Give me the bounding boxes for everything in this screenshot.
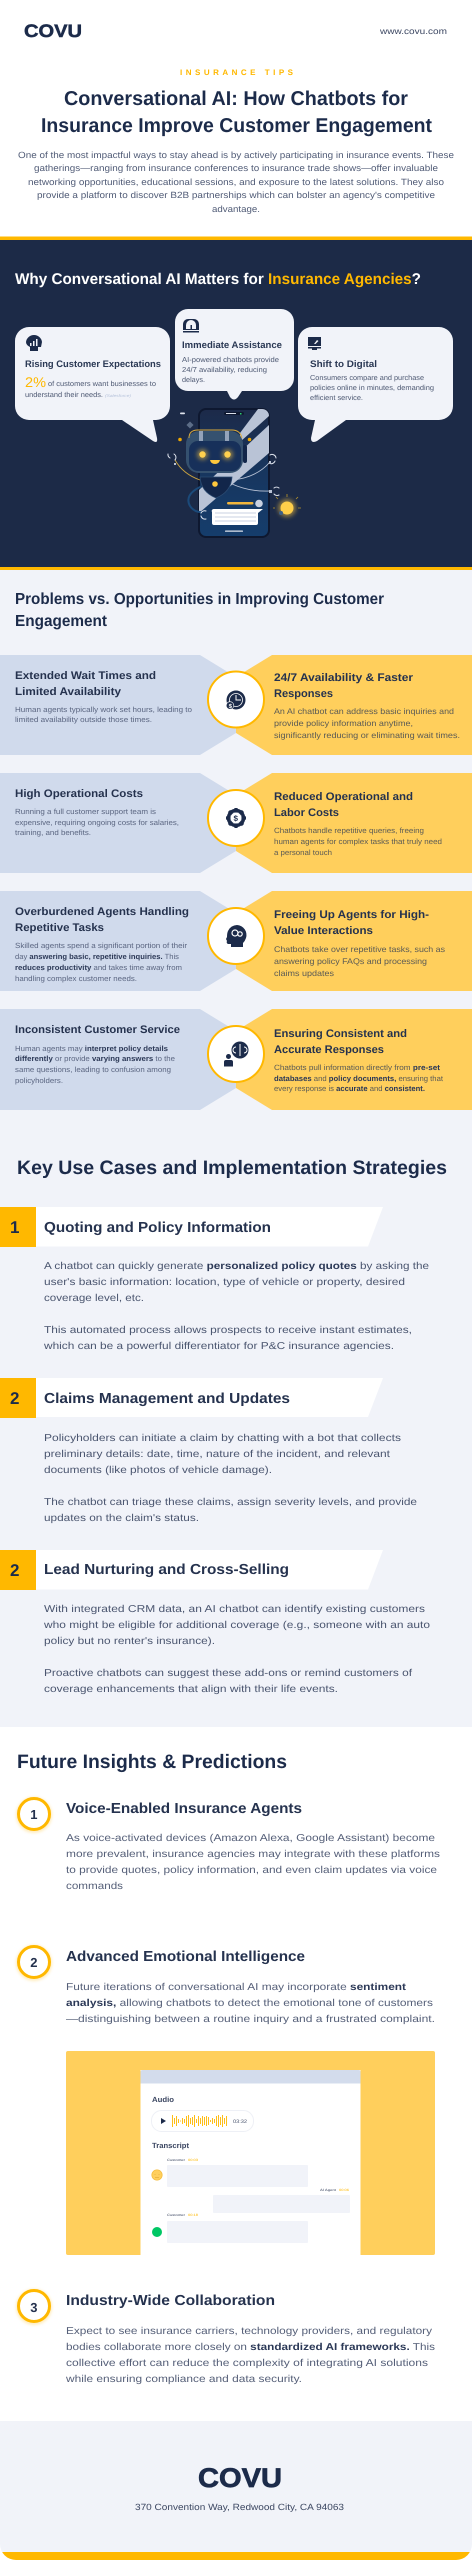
lightbulb xyxy=(273,494,301,517)
opportunity card: a personal touch xyxy=(274,848,332,857)
row: wait times vs availability xyxy=(0,655,472,755)
problem card xyxy=(0,655,236,755)
insight 1: voice-enabled agents: Voice-Enabled Insurance Agents xyxy=(66,1801,302,1817)
robot arms xyxy=(168,454,279,519)
body text: With integrated CRM data, an AI chatbot can identify existing customers xyxy=(44,1604,425,1615)
message: customer, positive: 00:18 xyxy=(188,2213,198,2217)
use case 3: lead nurturing and cross-selling: Lead Nurturing and Cross-Selling xyxy=(44,1562,289,1578)
message: customer, positive: Customer xyxy=(167,2213,186,2217)
transcript label: Transcript xyxy=(152,2141,190,2150)
audio player xyxy=(152,2110,254,2132)
heading: Engagement xyxy=(15,613,108,630)
insight 2: emotional intelligence: analysis, allowing chatbots to detect the emotional tone of customers xyxy=(66,1998,433,2009)
heading: Future Insights & Predictions xyxy=(17,1751,287,1773)
message: customer, neutral: Customer xyxy=(167,2158,186,2162)
row: consistency xyxy=(0,1009,472,1110)
body text: coverage level, etc. xyxy=(44,1293,144,1304)
body text: updates on the claim's status. xyxy=(44,1513,199,1524)
floating shapes xyxy=(180,412,194,429)
problem card: policyholders. xyxy=(15,1076,63,1085)
insight 3: industry-wide collaboration xyxy=(18,2290,435,2385)
use case 3: lead nurturing and cross-selling xyxy=(0,1550,431,1695)
audio label: Audio xyxy=(152,2095,174,2104)
panel: why conversational AI matters xyxy=(0,236,472,570)
address: 370 Convention Way, Redwood City, CA 94063 xyxy=(135,2502,344,2512)
insight 3: industry-wide collaboration: 3 xyxy=(30,2300,38,2315)
icon: head with gears xyxy=(208,908,264,964)
problem card xyxy=(0,773,236,873)
problem card: High Operational Costs xyxy=(15,788,143,800)
speech bubble: shift to digital xyxy=(298,327,453,442)
speech bubble: shift to digital: policies online in minutes, demanding xyxy=(310,383,434,392)
message: customer, neutral: 00:03 xyxy=(188,2158,198,2162)
use case 1: quoting and policy information: 1 xyxy=(10,1218,19,1237)
icon: monitor xyxy=(308,337,321,350)
body text: preliminary details: date, time, nature of the incident, and relevant xyxy=(44,1449,390,1460)
opportunity card: Accurate Responses xyxy=(274,1044,384,1056)
body text xyxy=(43,1604,431,1695)
message: AI agent: AI Agent xyxy=(320,2188,336,2192)
row: operational costs xyxy=(0,773,472,873)
heading: Problems vs. Opportunities in Improving Customer xyxy=(15,591,384,608)
icon: speedometer xyxy=(183,319,199,332)
insight 1: voice-enabled agents: As voice-activated devices (Amazon Alexa, Google Assistant) become xyxy=(66,1833,436,1844)
insight 3: industry-wide collaboration: while ensuring compliance and data security. xyxy=(65,2374,302,2385)
problem card: Human agents may interpret policy details xyxy=(15,1044,168,1053)
insight 3: industry-wide collaboration: collective effort can reduce the complexity of integrating AI solutions xyxy=(66,2358,428,2369)
problem card: differently or provide varying answers to the xyxy=(15,1054,175,1063)
use case 2: claims management and updates: Claims Management and Updates xyxy=(44,1391,290,1407)
opportunity card: databases and policy documents, ensuring that xyxy=(274,1074,444,1083)
insight 2: emotional intelligence: —distinguishing between a routine inquiry and a frustrated complaint. xyxy=(66,2014,435,2025)
body text: Policyholders can initiate a claim by chatting with a bot that collects xyxy=(44,1433,401,1444)
website url: www.covu.com xyxy=(379,26,447,36)
opportunity card: Chatbots handle repetitive queries, freeing xyxy=(274,826,424,835)
insight 1: voice-enabled agents: more prevalent, insurance agencies may integrate with these platforms xyxy=(66,1849,440,1860)
problem card: Human agents typically work set hours, leading to xyxy=(15,705,192,714)
opportunity card: Value Interactions xyxy=(274,925,373,937)
message: customer, positive xyxy=(152,2213,308,2243)
opportunity card: Chatbots pull information directly from pre-set xyxy=(274,1063,440,1072)
chat bubble on phone xyxy=(227,502,254,504)
opportunity card: Labor Costs xyxy=(274,807,339,819)
insight 2: emotional intelligence xyxy=(18,1946,435,2025)
problem card: limited availability outside those times. xyxy=(15,715,152,724)
problem card: same questions, leading to confusion among xyxy=(15,1065,171,1074)
insight 1: voice-enabled agents: to provide quotes, policy information, and even claim updates via voice xyxy=(66,1865,438,1876)
intro paragraph: gatherings—ranging from insurance conferences to insurance trade shows—offer invaluable xyxy=(34,163,438,173)
speech bubble: immediate assistance: AI-powered chatbots provide xyxy=(182,355,279,364)
opportunity card: Freeing Up Agents for High- xyxy=(274,909,429,921)
message: customer, neutral xyxy=(152,2158,308,2187)
icon: gear with dollar: $ xyxy=(234,814,238,823)
opportunity card xyxy=(236,773,472,873)
problem card: day answering basic, repetitive inquiries. This xyxy=(15,952,179,961)
insight 2: emotional intelligence: 2 xyxy=(30,1955,38,1970)
opportunity card: provide policy information anytime, xyxy=(274,719,413,728)
insight 3: industry-wide collaboration: Industry-Wide Collaboration xyxy=(66,2293,275,2309)
intro paragraph xyxy=(18,150,454,214)
body text: policy but no renter's insurance). xyxy=(44,1636,215,1647)
opportunity card: Responses xyxy=(274,688,333,700)
problem card: Skilled agents spend a significant portion of their xyxy=(15,941,188,950)
use case 2: claims management and updates xyxy=(0,1378,418,1524)
body text: This automated process allows prospects to receive instant estimates, xyxy=(44,1325,412,1336)
speech bubble: rising customer expectations: Rising Customer Expectations xyxy=(25,359,161,370)
row: repetitive tasks xyxy=(0,891,472,991)
robot head xyxy=(178,430,251,473)
opportunity card: human agents for complex tasks that truly need xyxy=(274,837,442,846)
panel: footer xyxy=(0,2421,472,2560)
problem card: Limited Availability xyxy=(15,686,122,698)
speech bubble: immediate assistance xyxy=(175,309,294,400)
problem card xyxy=(0,891,236,991)
problem card: Repetitive Tasks xyxy=(15,922,104,934)
title xyxy=(41,88,432,137)
body text: which can be a powerful differentiator for P&C insurance agencies. xyxy=(43,1341,394,1352)
intro paragraph: provide a platform to discover B2B partnerships which can bolster an agency's competitive xyxy=(37,190,435,200)
opportunity card: Ensuring Consistent and xyxy=(274,1028,407,1040)
intro paragraph: One of the most impactful ways to stay ahead is by actively participating in insurance events. These xyxy=(18,150,454,160)
problem card: Running a full customer support team is xyxy=(15,807,156,816)
heading: key use cases: Key Use Cases and Implementation Strategies xyxy=(17,1157,447,1179)
body text: coverage enhancements that align with their life events. xyxy=(44,1684,338,1695)
problem card xyxy=(0,1009,236,1110)
insight 1: voice-enabled agents: 1 xyxy=(30,1807,38,1822)
insight 1: voice-enabled agents: commands xyxy=(66,1881,123,1892)
chest light xyxy=(212,481,218,487)
speech bubble: shift to digital: Consumers compare and purchase xyxy=(310,373,424,382)
illustration: robot on phone xyxy=(168,409,301,537)
problem card: handling complex customer needs. xyxy=(15,974,137,983)
robot body xyxy=(200,477,232,498)
opportunity card: An AI chatbot can address basic inquiries and xyxy=(274,707,454,716)
opportunity card: Chatbots take over repetitive tasks, such as xyxy=(274,945,445,954)
use case 1: quoting and policy information xyxy=(0,1207,429,1352)
insight 2: emotional intelligence: Advanced Emotional Intelligence xyxy=(66,1949,305,1965)
heading xyxy=(15,591,384,630)
problem card: training, and benefits. xyxy=(15,828,91,837)
insight 3: industry-wide collaboration: Expect to see insurance carriers, technology providers, and regulatory xyxy=(66,2326,432,2337)
problem card: Extended Wait Times and xyxy=(15,670,156,682)
opportunity card: significantly reducing or eliminating wait times. xyxy=(274,731,460,740)
title: Conversational AI: How Chatbots for xyxy=(64,88,408,110)
speech bubble: shift to digital: efficient service. xyxy=(310,393,363,402)
speech bubble: rising customer expectations xyxy=(15,327,170,442)
opportunity card: answering policy FAQs and processing xyxy=(274,957,427,966)
use case 3: lead nurturing and cross-selling: 2 xyxy=(10,1561,19,1580)
opportunity card: Reduced Operational and xyxy=(274,791,413,803)
icon: gear with dollar xyxy=(208,790,264,846)
opportunity card: claims updates xyxy=(274,969,334,978)
heading: Why Conversational AI Matters for Insurance Agencies? xyxy=(15,271,421,288)
icon: clock with dollar xyxy=(208,672,264,728)
body text: documents (like photos of vehicle damage). xyxy=(44,1465,272,1476)
message: AI agent: 00:06 xyxy=(339,2188,349,2192)
opportunity card xyxy=(236,891,472,991)
intro paragraph: advantage. xyxy=(212,204,260,214)
problem card: Inconsistent Customer Service xyxy=(15,1024,180,1036)
body text: The chatbot can triage these claims, assign severity levels, and provide xyxy=(44,1497,418,1508)
use case 2: claims management and updates: 2 xyxy=(10,1389,19,1408)
logo: COVU: COVU xyxy=(24,21,82,41)
body text xyxy=(43,1261,429,1352)
audio player: 03:32 xyxy=(233,2119,247,2125)
panel: header xyxy=(0,0,472,237)
opportunity card: every response is accurate and consistent. xyxy=(274,1084,425,1093)
phone xyxy=(199,409,269,537)
title: Insurance Improve Customer Engagement xyxy=(41,115,432,137)
speech bubble: rising customer expectations: (Salesforce) xyxy=(105,393,132,398)
speech bubble: shift to digital: Shift to Digital xyxy=(310,359,377,370)
body text: user's basic information: location, type of vehicle or property, desired xyxy=(44,1277,405,1288)
intro paragraph: networking opportunities, educational sessions, and exposure to the latest solutions. They also xyxy=(28,177,444,187)
panel: problems vs opportunities xyxy=(0,570,472,1727)
speech bubble: immediate assistance: 24/7 availability, reducing xyxy=(182,365,267,374)
eyebrow label: INSURANCE TIPS xyxy=(180,68,294,77)
problem card: Overburdened Agents Handling xyxy=(15,906,189,918)
opportunity card xyxy=(236,1009,472,1110)
icon: clock with dollar: $ xyxy=(229,703,233,710)
insight 2: emotional intelligence: Future iterations of conversational AI may incorporate sentiment xyxy=(66,1982,407,1993)
body text: Proactive chatbots can suggest these add-ons or remind customers of xyxy=(44,1668,412,1679)
icon: head with chart xyxy=(26,335,42,351)
problem card: expensive, requiring ongoing costs for salaries, xyxy=(15,818,179,827)
speech bubble: rising customer expectations: understand their needs. xyxy=(25,390,103,399)
opportunity card xyxy=(236,655,472,755)
message: AI agent xyxy=(213,2188,350,2213)
insight 1: voice-enabled agents xyxy=(18,1798,440,1892)
footer logo: COVU xyxy=(198,2463,282,2493)
problem card: reduces productivity and takes time away from xyxy=(15,963,182,972)
speech bubble: immediate assistance: Immediate Assistance xyxy=(182,340,282,351)
illustration: call transcript screen xyxy=(66,2051,435,2255)
body text: who might be eligible for additional coverage (e.g., someone with an auto xyxy=(43,1620,431,1631)
icon: person with brain bubble xyxy=(208,1026,264,1082)
stat: 2%: 2% xyxy=(25,374,46,390)
opportunity card: 24/7 Availability & Faster xyxy=(274,672,414,684)
body text xyxy=(44,1433,418,1524)
body text: A chatbot can quickly generate personalized policy quotes by asking the xyxy=(44,1261,429,1272)
panel: future insights xyxy=(0,1727,472,2421)
use case 1: quoting and policy information: Quoting and Policy Information xyxy=(44,1220,271,1236)
insight 3: industry-wide collaboration: bodies collaborate more closely on standardized AI frameworks. This xyxy=(66,2342,435,2353)
speech bubble: rising customer expectations: of customers want businesses to xyxy=(48,379,156,388)
speech bubble: immediate assistance: delays. xyxy=(182,375,205,384)
